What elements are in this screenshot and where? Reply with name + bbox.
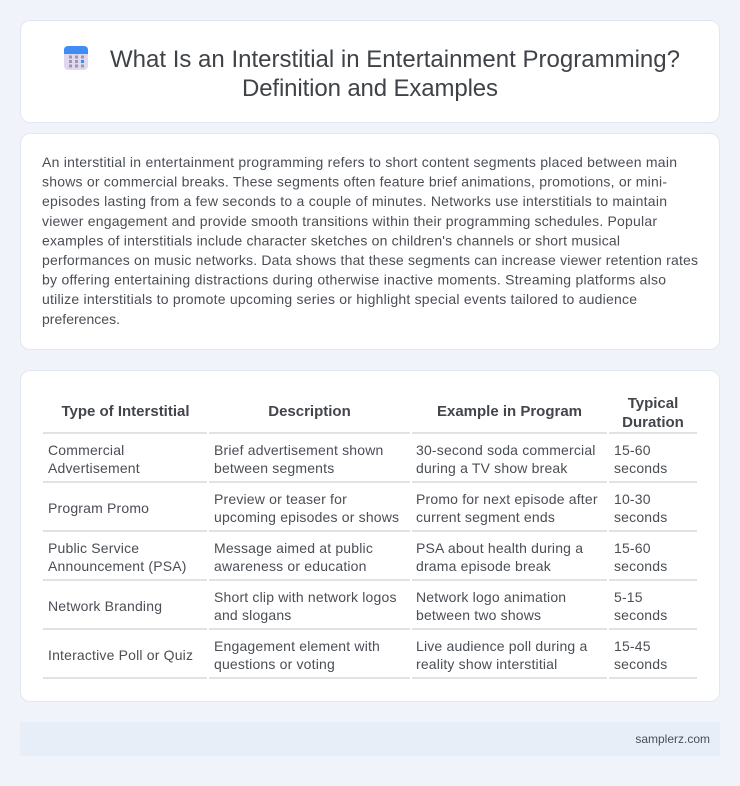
table: 15-45 <box>614 638 651 654</box>
table: PSA about health during a <box>416 540 583 556</box>
table: 15-60 <box>614 540 651 556</box>
table: Network logo animation <box>416 589 566 605</box>
footer text: samplerz.com <box>635 732 710 746</box>
title: What Is an Interstitial in Entertainment Programming? <box>110 46 680 73</box>
header: typical duration: Typical <box>628 395 678 412</box>
intro text: shows or commercial breaks. These segments often feature brief animations, promotions, or mini- <box>42 174 667 190</box>
table: reality show interstitial <box>416 656 557 672</box>
table: 10-30 <box>614 491 651 507</box>
intro text: episodes lasting from a few seconds to a couple of minutes. Networks use interstitials to maintain <box>42 193 667 209</box>
intro text: viewer engagement and provide smooth transitions within their programming schedules. Popular <box>42 213 657 229</box>
title: Definition and Examples <box>242 75 498 102</box>
table: and slogans <box>214 607 291 623</box>
header: example in program: Example in Program <box>437 403 582 420</box>
intro text: examples of interstitials include character sketches on children's channels or short musical <box>42 232 620 248</box>
table: upcoming episodes or shows <box>214 509 399 525</box>
table: seconds <box>614 509 667 525</box>
intro text: performances on music networks. Data shows that these segments can increase viewer retention rates <box>42 252 698 268</box>
row: interactive poll or quiz: Interactive Poll or Quiz <box>48 647 193 663</box>
header: type of interstitial: Type of Interstitial <box>61 403 190 420</box>
table: 5-15 <box>614 589 643 605</box>
table: current segment ends <box>416 509 555 525</box>
table: Preview or teaser for <box>214 491 347 507</box>
table: Short clip with network logos <box>214 589 397 605</box>
intro text: preferences. <box>42 311 120 327</box>
table: 15-60 <box>614 442 651 458</box>
table: questions or voting <box>214 656 335 672</box>
table <box>43 395 697 679</box>
intro text: utilize interstitials to promote upcoming series or highlight special events tailored to audience <box>42 291 637 307</box>
row: program promo: Program Promo <box>48 500 149 516</box>
row: network branding: Network Branding <box>48 598 162 614</box>
table: 30-second soda commercial <box>416 442 596 458</box>
table: seconds <box>614 656 667 672</box>
table: during a TV show break <box>416 460 568 476</box>
row: public service announcement: Announcement (PSA) <box>48 558 187 574</box>
table: seconds <box>614 558 667 574</box>
row: public service announcement: Public Service <box>48 540 139 556</box>
header: description: Description <box>268 403 351 420</box>
row: commercial advertisement: Commercial <box>48 442 124 458</box>
header: typical duration <box>622 395 684 430</box>
panel: table card <box>20 370 720 702</box>
table: between two shows <box>416 607 541 623</box>
table: Promo for next episode after <box>416 491 598 507</box>
table: Brief advertisement shown <box>214 442 383 458</box>
row: public service announcement <box>48 540 187 574</box>
header: typical duration: Duration <box>622 414 684 430</box>
panel: intro text card <box>20 133 720 350</box>
intro text: by offering entertaining distractions during otherwise inactive moments. Streaming platforms also <box>42 272 666 288</box>
table: drama episode break <box>416 558 551 574</box>
intro text: An interstitial in entertainment programming refers to short content segments placed between main <box>42 154 677 170</box>
table: seconds <box>614 460 667 476</box>
table: Live audience poll during a <box>416 638 587 654</box>
panel: title card <box>20 20 720 123</box>
row: commercial advertisement <box>48 442 140 476</box>
table: Message aimed at public <box>214 540 373 556</box>
table: between segments <box>214 460 334 476</box>
table: awareness or education <box>214 558 367 574</box>
table: seconds <box>614 607 667 623</box>
row: commercial advertisement: Advertisement <box>48 460 140 476</box>
icon: calendar <box>64 46 88 70</box>
table: Engagement element with <box>214 638 380 654</box>
footer bar <box>20 722 720 756</box>
intro text <box>42 154 698 327</box>
title <box>110 46 680 102</box>
